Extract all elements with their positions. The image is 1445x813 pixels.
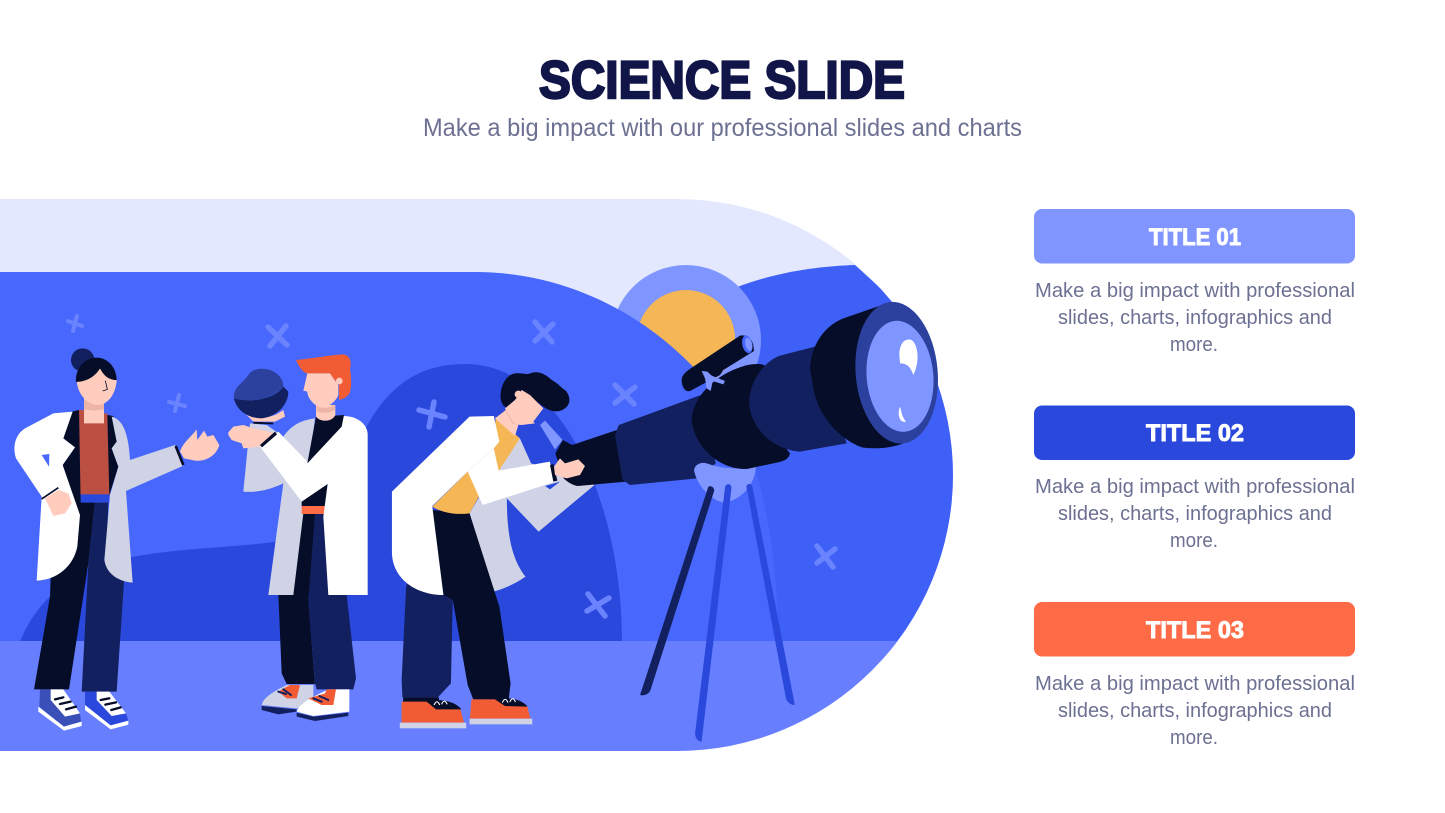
panel: title 02: more. xyxy=(1170,529,1218,552)
subtitle: Make a big impact with our professional slides and charts xyxy=(423,114,1022,142)
panel: title 03: Make a big impact with professional xyxy=(1035,672,1355,695)
panel: title 01: slides, charts, infographics and xyxy=(1058,306,1332,329)
panel: title 02 xyxy=(1034,406,1355,552)
telescope xyxy=(545,298,944,742)
person 1: woman in lab coat xyxy=(14,348,219,731)
panel: title 01: Make a big impact with professional xyxy=(1035,279,1355,302)
panel: title 03: slides, charts, infographics and xyxy=(1058,699,1332,722)
person 3: scientist looking through telescope xyxy=(392,372,595,728)
panel: title 03: more. xyxy=(1170,726,1218,749)
panel: title 03 xyxy=(1034,602,1355,749)
person 2: man in lab coat with colleague xyxy=(228,354,368,721)
panel: title 01: TITLE 01 xyxy=(1149,224,1241,251)
panel: title 03: TITLE 03 xyxy=(1146,617,1244,644)
panel: title 02: Make a big impact with professional xyxy=(1035,475,1355,498)
illustration background xyxy=(0,199,970,753)
panel: title 02: TITLE 02 xyxy=(1146,420,1244,447)
panel: title 01: more. xyxy=(1170,333,1218,356)
panel: title 01 xyxy=(1034,209,1355,356)
panel: title 02: slides, charts, infographics and xyxy=(1058,502,1332,525)
stars xyxy=(68,316,835,616)
title: SCIENCE SLIDE xyxy=(539,51,905,110)
